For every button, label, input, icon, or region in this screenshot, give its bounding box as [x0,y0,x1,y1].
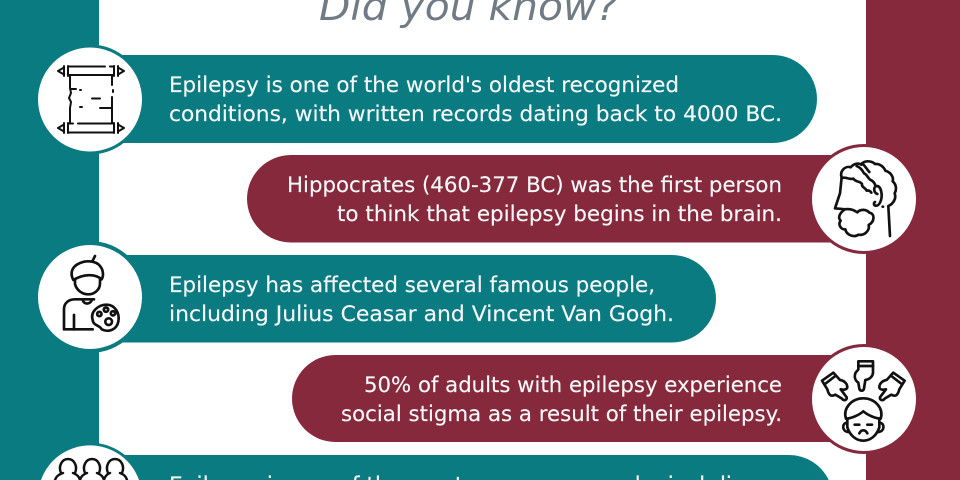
fact text: Hippocrates (460-377 BC) was the first person [287,173,782,198]
pill background [292,355,907,442]
pill background [60,55,817,143]
fact text: conditions, with written records dating back to 4000 BC. [169,102,782,127]
pill background [60,255,716,342]
fact text [169,273,674,327]
panel: fact 1 oldest recognized conditions [35,44,817,154]
fact text [287,173,782,227]
panel: fact 3 famous people [34,241,716,353]
icon: Hippocrates profile head [809,144,919,254]
fact text: Epilepsy has affected several famous people, [169,273,655,298]
fact text: 50% of adults with epilepsy experience [364,373,782,398]
fact text: Epilepsy is one of the world's oldest recognized [169,73,679,98]
left teal side band [0,0,99,480]
icon: group of people [38,443,142,480]
right maroon side band [866,0,960,480]
pill background [60,455,829,480]
panel: fact 2 Hippocrates [247,144,919,254]
fact text: including Julius Ceasar and Vincent Van Gogh. [169,302,674,327]
icon: painter with palette [34,241,146,353]
panel: fact 5 common neurological diseases [38,443,829,480]
icon: pointing hands at sad person [809,344,919,454]
icon: scroll [35,44,145,154]
fact text [169,73,782,127]
fact text: to think that epilepsy begins in the brain. [337,202,782,227]
fact text [341,373,782,427]
fact text: social stigma as a result of their epilepsy. [341,402,782,427]
panel: fact 4 social stigma [292,344,919,454]
pill background [247,155,907,242]
